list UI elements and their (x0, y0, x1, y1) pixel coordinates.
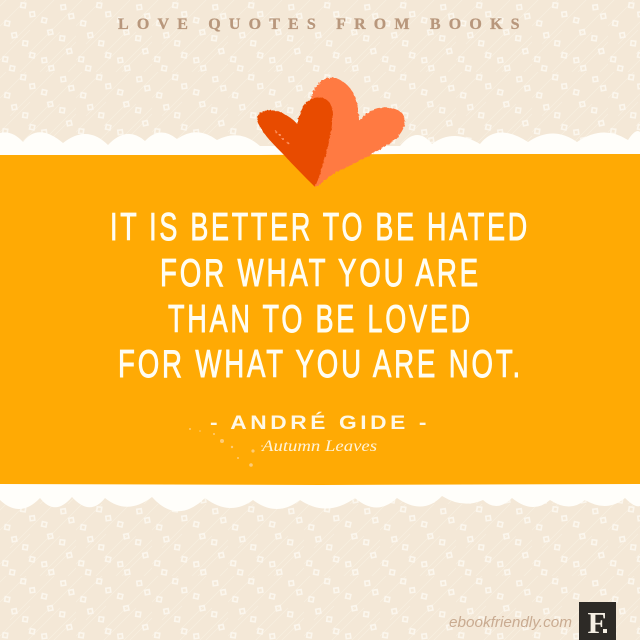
icon: ebookfriendly logo (579, 602, 616, 640)
quote text (110, 206, 530, 386)
torn white edge: bottom (0, 480, 640, 511)
icon: heart speckles (275, 131, 289, 144)
icon: two hearts (257, 78, 405, 187)
book title: Autumn Leaves (261, 438, 377, 455)
heading: LOVE QUOTES FROM BOOKS (118, 16, 525, 33)
website label: ebookfriendly.com (449, 615, 572, 631)
author: - ANDRÉ GIDE - (210, 412, 430, 434)
yellow quote band (0, 154, 640, 485)
quote line 3: THAN TO BE LOVED (168, 298, 473, 341)
quote line 2: FOR WHAT YOU ARE (160, 252, 481, 295)
torn white edge: top (0, 131, 640, 156)
icon: ebookfriendly logo: F (588, 605, 606, 640)
splatter decoration (189, 428, 263, 467)
icon: light heart (300, 78, 405, 187)
icon: dark heart (257, 97, 333, 187)
